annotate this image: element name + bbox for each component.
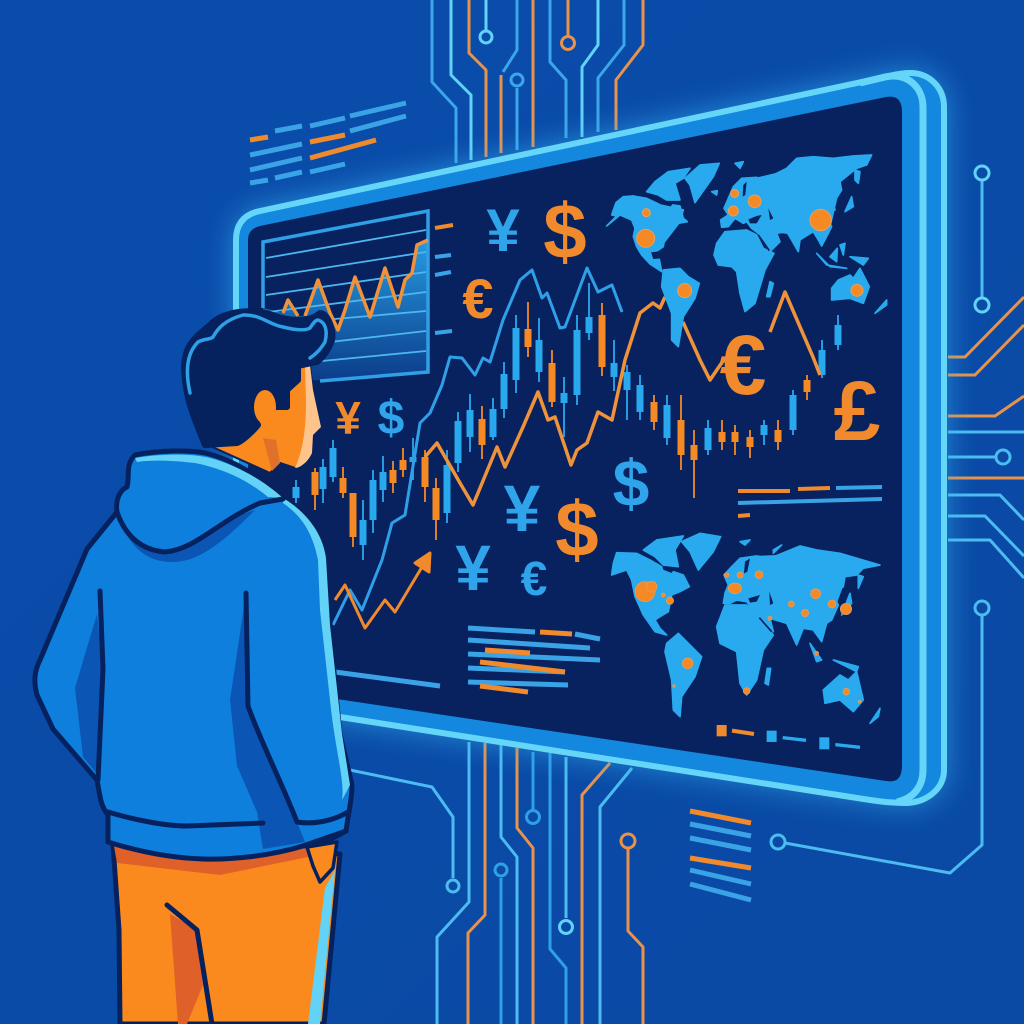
currency symbols: ¥ (335, 392, 361, 444)
screen frame (236, 73, 944, 803)
neck shadow (263, 438, 280, 471)
ear (254, 390, 276, 424)
circuit lines: bottom (350, 742, 643, 1024)
data bars: lower centre (690, 811, 751, 900)
rising arrow (335, 553, 430, 628)
currency symbols: $ (613, 446, 649, 520)
blue trend line (333, 268, 622, 625)
screen text bars: right (738, 487, 882, 516)
small line chart panel (263, 211, 453, 385)
currency symbols: ¥ (486, 197, 520, 264)
trouser seam (167, 905, 212, 1024)
world map: bottom (612, 533, 880, 749)
screen panel (248, 97, 902, 781)
trousers (113, 845, 340, 1024)
map legend (717, 725, 860, 749)
currency symbols: $ (543, 187, 587, 275)
hood edge (117, 499, 283, 552)
circuit lines: top (432, 0, 643, 163)
currency symbols: € (462, 267, 494, 330)
face highlight (295, 365, 321, 468)
currency symbols (335, 187, 880, 606)
hair (184, 311, 332, 445)
currency symbols: € (720, 318, 766, 412)
currency symbols: ¥ (504, 471, 541, 545)
person (35, 311, 352, 1024)
currency symbols: € (521, 553, 547, 606)
hair highlight (187, 315, 326, 393)
trouser highlight (308, 870, 335, 1024)
circuit lines: right (771, 166, 1024, 873)
hoodie shadows (75, 510, 305, 849)
currency symbols: ¥ (455, 532, 491, 604)
orange trend line (425, 292, 820, 505)
world map: top (607, 155, 887, 347)
trouser shadows (114, 846, 320, 1024)
sleeve and arm lines (98, 591, 348, 846)
hand in pocket (307, 842, 337, 882)
hoodie highlights (135, 455, 350, 800)
candlestick chart (296, 283, 838, 560)
currency symbols: $ (378, 392, 405, 445)
currency symbols: $ (555, 485, 599, 573)
screen text bars: centre bottom (335, 628, 600, 692)
screen glow (236, 73, 944, 803)
currency symbols: £ (834, 364, 880, 458)
hoodie body (35, 451, 352, 859)
data bars: upper left (250, 103, 406, 183)
face and neck (208, 365, 321, 473)
